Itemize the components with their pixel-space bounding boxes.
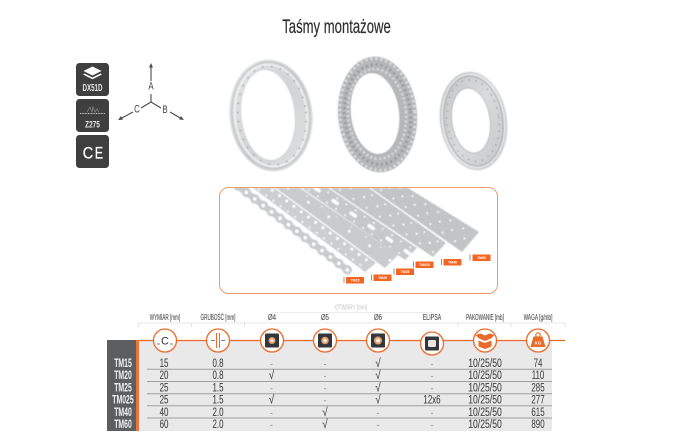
column: wymiar: 15 <box>160 358 169 371</box>
icon: hole 6 <box>366 329 390 352</box>
column: elipsa: - <box>430 359 434 369</box>
column: wymiar: 60 <box>160 419 169 432</box>
strip TM025 <box>302 186 417 260</box>
product photo: ring 3 <box>433 67 514 175</box>
column: Ø4: - <box>270 384 273 394</box>
icon: weight: KG <box>535 340 542 346</box>
strip TM40 <box>330 186 446 257</box>
table header row: WYMIAR [mm] <box>150 314 180 322</box>
column: waga: 277 <box>531 394 545 407</box>
size tags: TM60 <box>477 256 486 260</box>
product photo: ring 1 <box>224 55 318 176</box>
badge: CE mark: C <box>83 144 93 163</box>
table header row: Ø6 <box>374 314 382 322</box>
column: wymiar <box>160 358 169 432</box>
icon: dimension C: C <box>161 336 169 348</box>
column: waga: 285 <box>531 382 545 395</box>
table values <box>160 357 545 432</box>
column: Ø6: √ <box>375 394 381 407</box>
size tags <box>344 254 490 284</box>
column: elipsa: - <box>430 371 434 381</box>
column icons <box>154 329 550 355</box>
axis diagram A B C: C <box>134 103 140 116</box>
column: Ø6 <box>375 357 381 430</box>
size tags: TM25 <box>401 270 410 274</box>
strip TM25 <box>276 186 398 268</box>
column: elipsa: - <box>430 408 434 418</box>
row label column <box>107 340 139 432</box>
row label column: TM60 <box>114 418 132 432</box>
column: grubość: 2.0 <box>212 407 224 420</box>
row label column: TM40 <box>114 406 132 420</box>
icon: ellipse hole <box>420 332 444 355</box>
row label column: TM15 <box>114 357 132 371</box>
column: Ø4: √ <box>269 369 274 382</box>
axis diagram A B C: A <box>148 80 154 93</box>
table header row: GRUBOŚĆ [mm] <box>201 311 236 322</box>
column: pakowanie: 10/25/50 <box>468 370 502 382</box>
table body background <box>139 340 552 431</box>
column: grubość: 0.8 <box>212 358 224 371</box>
column: pakowanie: 10/25/50 <box>468 394 502 407</box>
column: Ø5: - <box>324 371 326 381</box>
column: grubość: 1.5 <box>212 394 224 407</box>
column: Ø6: - <box>376 408 380 418</box>
strip TM20 <box>253 185 376 272</box>
column: pakowanie: 10/25/50 <box>468 358 502 370</box>
row label column: TM025 <box>112 394 134 407</box>
size tags: TM20 <box>378 276 387 280</box>
column: waga: 110 <box>532 370 545 383</box>
column: pakowanie <box>468 358 502 431</box>
column: Ø5: - <box>324 359 326 369</box>
column: Ø5: √ <box>322 418 328 431</box>
product photo: ring 2 <box>333 53 422 176</box>
column: Ø4: √ <box>269 394 274 407</box>
strip TM60 <box>371 188 479 252</box>
column: elipsa <box>423 359 441 430</box>
column: Ø5: - <box>324 396 326 406</box>
axis diagram A B C <box>118 63 184 120</box>
badges column <box>76 63 109 168</box>
icon: dimension C <box>154 329 176 352</box>
badge: CE mark <box>76 135 109 168</box>
axis diagram A B C: B <box>162 104 168 116</box>
column: pakowanie: 10/25/50 <box>468 407 502 419</box>
badge: DX51D steel grade: DX51D <box>83 81 102 93</box>
size tags: TM15 <box>351 278 360 282</box>
column: waga <box>531 358 545 432</box>
icon: thickness <box>206 329 230 352</box>
column: wymiar: 40 <box>160 407 169 420</box>
column: wymiar: 25 <box>160 394 169 407</box>
strips <box>238 185 479 272</box>
table header row: PAKOWANIE [mb] <box>466 314 504 322</box>
icon: packaging box <box>474 329 496 352</box>
column: Ø4: - <box>270 359 273 369</box>
table header row: Ø5 <box>321 314 329 322</box>
specification table <box>107 305 565 432</box>
column: pakowanie: 10/25/50 <box>468 382 502 395</box>
column: waga: 615 <box>531 407 545 420</box>
column: elipsa: - <box>430 420 434 430</box>
column: wymiar: 20 <box>160 370 169 383</box>
size tags: TM025 <box>419 263 430 267</box>
column: grubość: 0.8 <box>212 370 224 383</box>
group heading: otwory: OTWORY [mm] <box>335 305 367 312</box>
column: Ø5 <box>322 359 328 431</box>
icon: weight <box>526 329 550 352</box>
row label column: TM20 <box>114 369 132 383</box>
panel: strip variants <box>220 185 498 294</box>
column: elipsa: 12x6 <box>423 394 441 407</box>
column: pakowanie: 10/25/50 <box>468 419 502 431</box>
badge: CE mark: E <box>95 145 103 163</box>
column: wymiar: 25 <box>160 382 169 395</box>
column: Ø5: - <box>324 384 326 394</box>
column: Ø4: - <box>270 408 273 418</box>
column: Ø6: √ <box>375 382 381 395</box>
table header row <box>150 311 553 322</box>
table header row: ELIPSA <box>423 314 442 322</box>
column: grubość: 2.0 <box>212 419 224 432</box>
column: Ø4: - <box>270 420 273 430</box>
column: Ø6: √ <box>375 357 381 370</box>
column: waga: 890 <box>531 419 545 432</box>
column: Ø6: √ <box>375 369 381 382</box>
column: grubość <box>212 358 224 432</box>
group heading: otwory <box>272 305 432 316</box>
badge: Z275 coating: Z275 <box>85 119 100 130</box>
title: Taśmy montażowe <box>282 17 391 38</box>
icon: hole 4 <box>260 329 284 352</box>
column: grubość: 1.5 <box>212 382 224 395</box>
icon: hole 5 <box>314 329 336 352</box>
table header row: WAGA [g/mb] <box>524 314 553 322</box>
column: Ø6: - <box>376 420 380 430</box>
column: Ø5: √ <box>322 406 328 419</box>
table header row: Ø4 <box>268 314 276 322</box>
column: Ø4 <box>269 359 274 430</box>
size tags: TM40 <box>448 260 457 264</box>
column: elipsa: - <box>430 384 434 394</box>
column: waga: 74 <box>534 358 543 371</box>
row label column: TM25 <box>114 382 132 395</box>
strip TM15 <box>238 186 350 272</box>
